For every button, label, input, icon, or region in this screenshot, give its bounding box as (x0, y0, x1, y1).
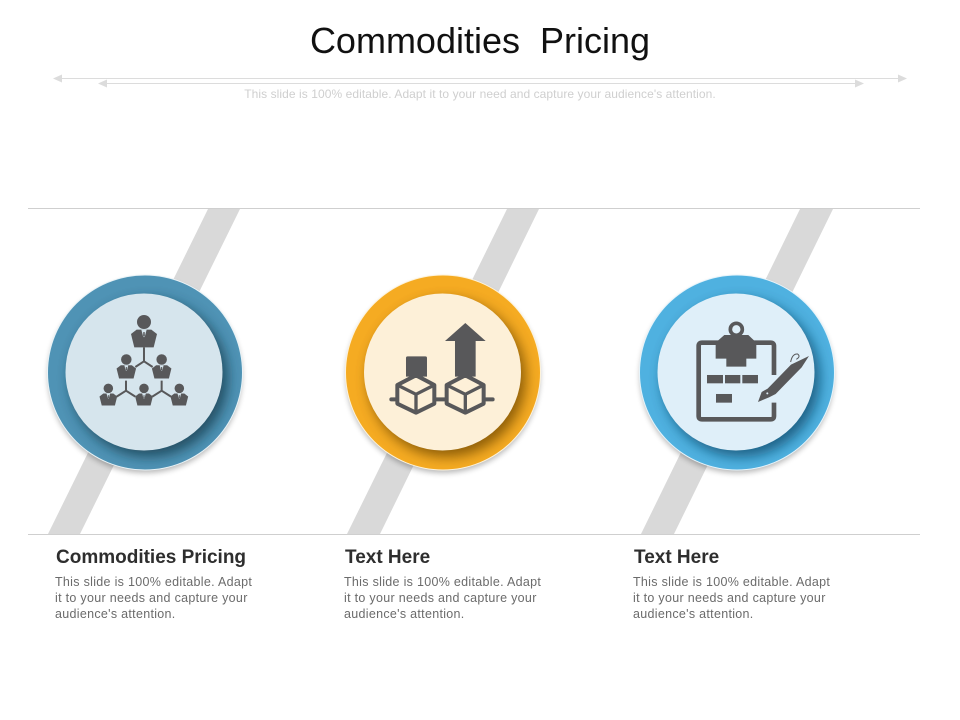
top and bottom horizontal rules (28, 208, 920, 534)
text block 1: audience's attention. (55, 607, 176, 621)
circle badge 1 (47, 274, 243, 473)
text block 1: This slide is 100% editable. Adapt (55, 575, 252, 589)
text block 2 (344, 547, 541, 621)
text block 1: Commodities Pricing (56, 547, 246, 568)
text block 2: audience's attention. (344, 607, 465, 621)
text block 1 (55, 547, 252, 621)
text block 3: Text Here (634, 547, 719, 568)
diagonal band 1 (48, 209, 240, 534)
icon: boxes and rising arrow (391, 323, 493, 413)
circle badge 3 (639, 274, 835, 473)
diagonal band 3 (641, 209, 833, 534)
icon: clipboard with pen (699, 323, 809, 419)
text block 3 (633, 547, 830, 621)
subtitle: This slide is 100% editable. Adapt it to your need and capture your audience's attention. (244, 87, 716, 101)
circle badge 2 (345, 274, 541, 473)
text block 2: Text Here (345, 547, 430, 568)
title: Commodities Pricing (310, 20, 650, 61)
text block 2: it to your needs and capture your (344, 591, 537, 605)
text block 1: it to your needs and capture your (55, 591, 248, 605)
text block 3: audience's attention. (633, 607, 754, 621)
icon: organisation hierarchy (99, 315, 188, 406)
text block 2: This slide is 100% editable. Adapt (344, 575, 541, 589)
text block 3: it to your needs and capture your (633, 591, 826, 605)
title arrows (53, 74, 907, 88)
diagonal band 2 (347, 209, 539, 534)
text block 3: This slide is 100% editable. Adapt (633, 575, 830, 589)
